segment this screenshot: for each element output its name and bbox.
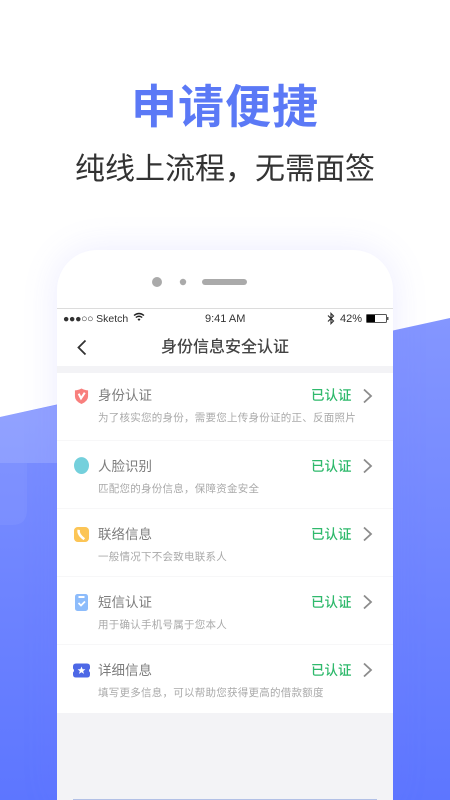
nav title: 身份信息安全认证	[161, 339, 289, 356]
row text: 联络信息	[98, 527, 152, 542]
status: 已认证	[311, 527, 352, 542]
icon: chevron	[364, 389, 372, 404]
row text: 详细信息	[98, 663, 152, 678]
row description: 匹配您的身份信息，保障资金安全	[98, 483, 259, 495]
status: 已认证	[311, 595, 352, 610]
row text: 人脸识别	[98, 459, 152, 474]
bottom edge line	[73, 799, 377, 800]
status bar	[57, 308, 393, 327]
icon: chevron	[364, 595, 372, 610]
icon: phone	[74, 527, 89, 542]
clock: 9:41 AM	[205, 313, 245, 325]
icon: chevron	[364, 459, 372, 474]
icon: ticket	[73, 664, 90, 678]
status: 已认证	[311, 388, 352, 403]
phone speaker and camera	[152, 277, 247, 287]
icon: chevron	[364, 663, 372, 678]
icon: battery	[366, 314, 388, 323]
icon: face	[74, 457, 89, 474]
navigation bar	[77, 338, 289, 356]
row description: 填写更多信息，可以帮助您获得更高的借款额度	[98, 687, 324, 699]
row: face	[57, 441, 393, 509]
row: details	[57, 645, 393, 713]
signal dots and carrier: ●●●○○ Sketch	[63, 313, 128, 325]
subtitle: 纯线上流程，无需面签	[75, 153, 375, 186]
row: sms	[57, 577, 393, 645]
icon: clipboard	[75, 594, 88, 611]
row text: 身份认证	[98, 388, 152, 403]
status: 已认证	[311, 459, 352, 474]
row description: 为了核实您的身份，需要您上传身份证的正、反面照片	[98, 412, 356, 424]
phone mockup	[57, 250, 393, 800]
status: 已认证	[311, 663, 352, 678]
list area	[57, 366, 393, 800]
row description: 一般情况下不会致电联系人	[98, 551, 227, 563]
icon: chevron	[364, 527, 372, 542]
icon: wifi	[134, 312, 144, 321]
row: identity	[57, 373, 393, 441]
row: contacts	[57, 509, 393, 577]
battery percent: 42%	[340, 313, 362, 325]
row text: 短信认证	[98, 595, 152, 610]
icon: bluetooth	[328, 312, 334, 325]
icon: back arrow	[77, 340, 86, 356]
title: 申请便捷	[131, 81, 319, 133]
row description: 用于确认手机号属于您本人	[98, 619, 227, 631]
icon: shield	[74, 388, 88, 404]
